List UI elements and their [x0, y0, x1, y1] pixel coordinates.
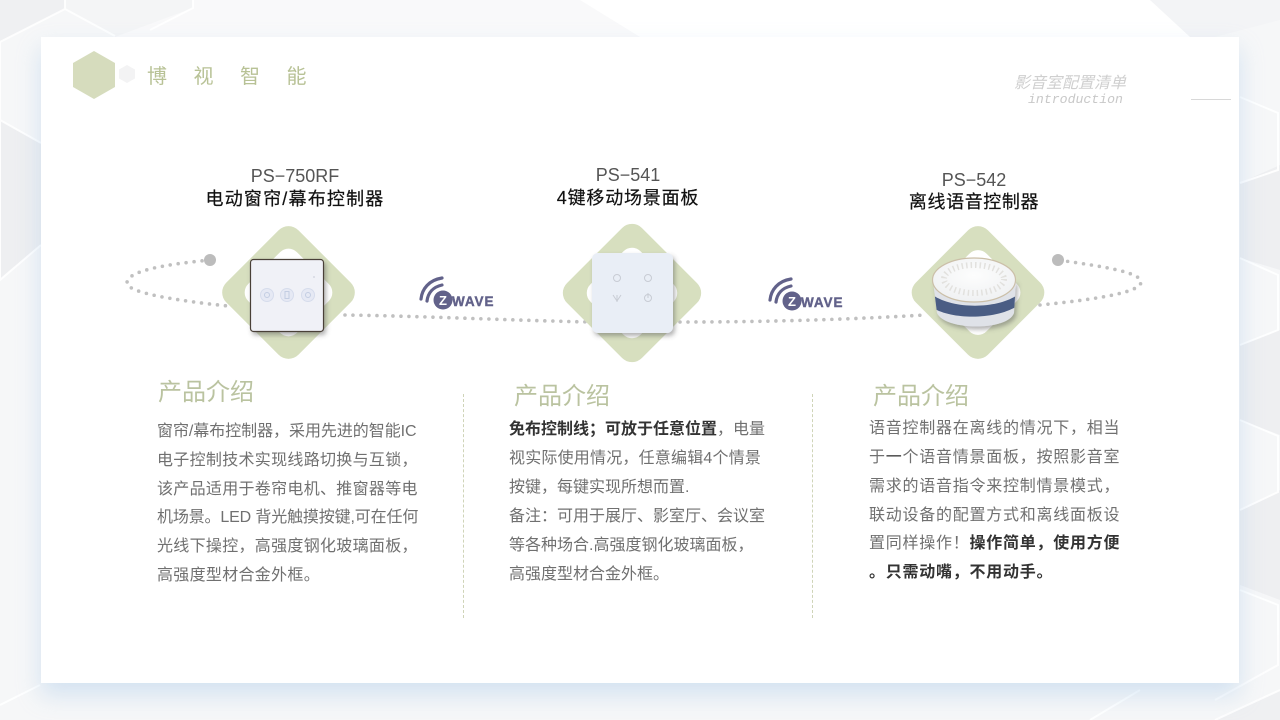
icon: z-wave logo right: Z — [788, 294, 796, 309]
icon: voice controller on diamond — [912, 226, 1044, 359]
description 2: 备注：可用于展厅、影室厅、会议室 — [509, 508, 765, 525]
header note: introduction — [1028, 92, 1123, 107]
brand title: 博视智能 — [147, 66, 333, 88]
description 1: 该产品适用于卷帘电机、推窗器等电 — [157, 481, 418, 498]
description 3: 语音控制器在离线的情况下，相当 — [869, 420, 1120, 437]
description 3 — [869, 419, 1120, 581]
description 1: 电子控制技术实现线路切换与互锁， — [157, 452, 418, 469]
icon: z-wave logo left: Z — [439, 293, 447, 308]
description 1: 窗帘/幕布控制器，采用先进的智能IC — [157, 423, 417, 440]
icon: z-wave logo left — [419, 276, 494, 310]
description 1: 高强度型材合金外框。 — [157, 567, 320, 584]
description 1: 机场景。LED 背光触摸按键,可在任何 — [157, 509, 418, 526]
header note — [1014, 74, 1126, 107]
description 2: 等各种场合.高强度钢化玻璃面板， — [509, 537, 753, 554]
description 2: 免布控制线；可放于任意位置，电量 — [509, 421, 765, 438]
section heading 2: 产品介绍 — [514, 383, 610, 410]
description 1 — [157, 422, 418, 584]
description 2: 视实际使用情况，任意编辑4个情景 — [509, 450, 761, 467]
description 3: 联动设备的配置方式和离线面板设 — [869, 507, 1120, 524]
product 2 title: 4键移动场景面板 — [557, 188, 699, 208]
description 1: 光线下操控，高强度钢化玻璃面板， — [157, 538, 418, 555]
product 2 model name: PS−541 — [596, 165, 660, 185]
divider 2 — [812, 394, 813, 618]
description 3: 需求的语音指令来控制情景模式， — [869, 478, 1120, 495]
description 2: 高强度型材合金外框。 — [509, 566, 669, 583]
header rule — [1191, 99, 1231, 100]
header note: 影音室配置清单 — [1014, 75, 1126, 92]
section heading 1: 产品介绍 — [158, 379, 254, 406]
icon: z-wave logo left: WAVE — [452, 294, 494, 309]
description 3: 置同样操作！操作简单，使用方便 — [869, 535, 1120, 552]
product 1 title: 电动窗帘/幕布控制器 — [206, 189, 384, 209]
icon: z-wave logo right: WAVE — [801, 295, 843, 310]
description 2: 按键，每键实现所想而置. — [509, 479, 689, 496]
icon: z-wave logo right — [768, 277, 843, 310]
description 2 — [509, 420, 765, 583]
divider 1 — [463, 394, 464, 618]
description 3: 。只需动嘴，不用动手。 — [869, 564, 1053, 581]
section heading 3: 产品介绍 — [873, 383, 969, 410]
description 3: 于一个语音情景面板，按照影音室 — [869, 449, 1120, 466]
product 1 model name: PS−750RF — [251, 166, 339, 186]
product 3 title: 离线语音控制器 — [909, 192, 1039, 212]
product 3 model name: PS−542 — [942, 170, 1006, 190]
